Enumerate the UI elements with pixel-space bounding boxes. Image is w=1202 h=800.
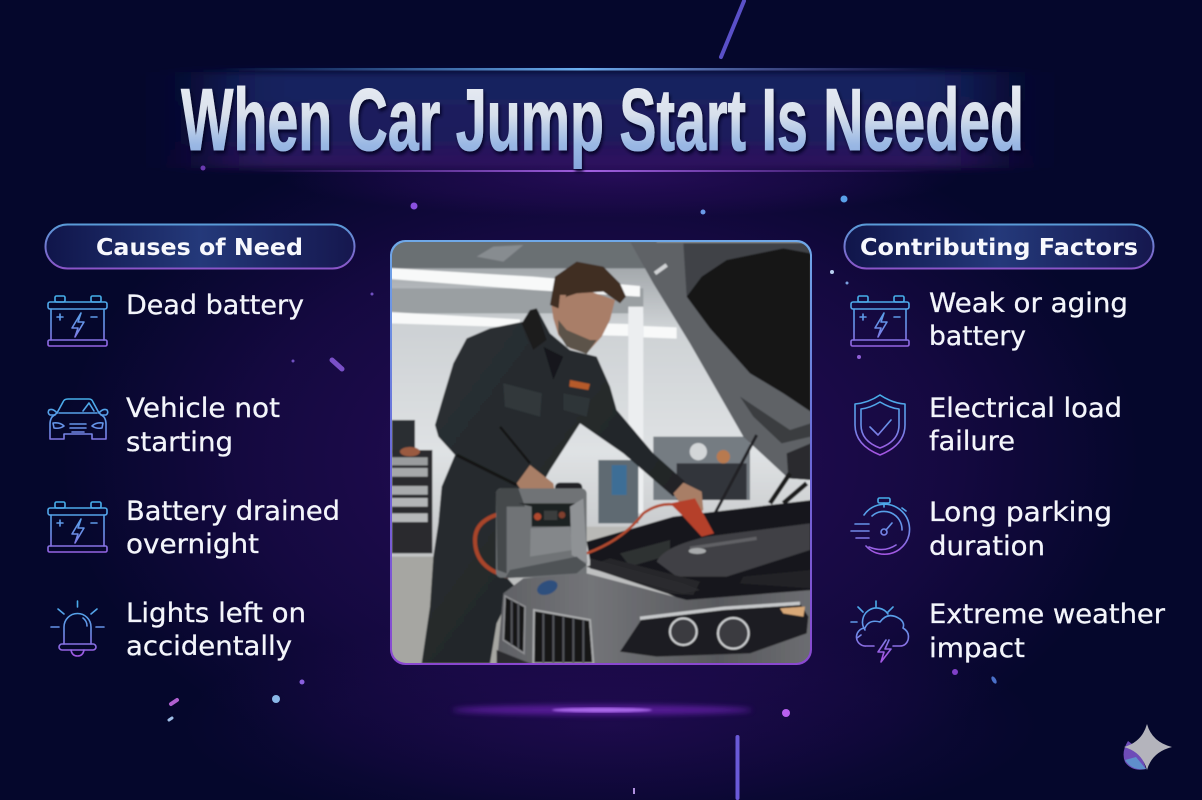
text: extreme weather impact: Extreme weather [929,599,1166,630]
photo: mechanic jump starting a car [390,240,812,665]
text: electrical load failure: failure [929,426,1015,457]
text: electrical load failure [929,393,1122,457]
jump starter [475,483,714,578]
headlight [620,603,808,657]
heading: contributing factors: Contributing Factors [860,233,1138,261]
text: extreme weather impact [929,599,1166,664]
heading: causes of need [46,224,354,268]
decorative particles [169,1,998,800]
icon: shield [855,395,905,455]
text: weak or aging battery [929,288,1128,352]
icon: battery [48,296,107,346]
text: dead battery: Dead battery [126,290,304,321]
text: electrical load failure: Electrical load [929,393,1122,424]
tool chest [392,420,432,553]
grille [497,596,593,663]
heading: contributing factors [844,224,1154,268]
text: battery drained overnight: overnight [126,529,259,560]
text: weak or aging battery: Weak or aging [929,288,1128,319]
text: vehicle not starting: starting [126,427,233,458]
icon: battery drained [48,502,107,552]
heading: causes of need: Causes of Need [96,233,303,261]
text: long parking duration: duration [929,531,1045,562]
icon: warning light [51,601,104,656]
watermark: sparkle icon [1124,724,1172,770]
panel: contributing factors [844,224,1166,664]
icon: stopwatch [851,498,910,554]
text: long parking duration [929,497,1112,562]
car front [497,558,812,665]
text: lights left on accidentally [126,598,306,662]
panel: causes of need [46,224,354,662]
text: extreme weather impact: impact [929,633,1025,664]
text: vehicle not starting [126,393,280,458]
engine bay [587,500,812,603]
text: vehicle not starting: Vehicle not [126,393,280,424]
text: weak or aging battery: battery [929,321,1026,352]
text: lights left on accidentally: accidentally [126,631,292,662]
open car hood [631,243,812,513]
icon: storm weather [851,601,908,662]
hands [516,464,555,490]
icon: aging battery [851,296,909,346]
mechanic [422,262,703,663]
text: long parking duration: Long parking [929,497,1112,528]
mechanic head [550,262,626,354]
workshop background [390,240,812,665]
title banner glow [215,68,985,218]
text: battery drained overnight [126,496,340,560]
text: battery drained overnight: Battery drained [126,496,340,527]
icon: car [48,399,108,439]
text: lights left on accidentally: Lights left on [126,598,306,629]
